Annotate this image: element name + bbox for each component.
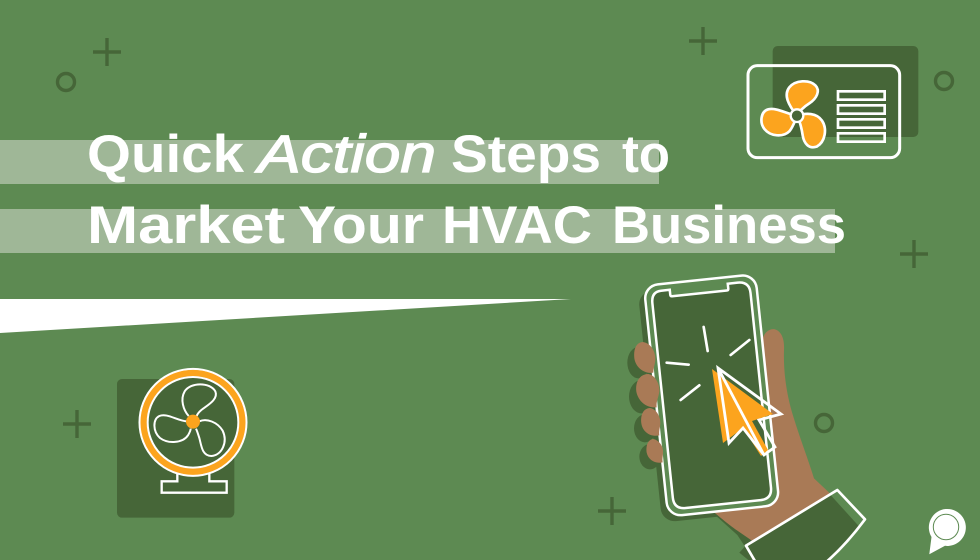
orange fan blades [761, 81, 825, 147]
title highlight bars [0, 140, 835, 253]
white wedge accent [0, 299, 571, 333]
unit backing panel [773, 46, 918, 137]
title: Business [612, 196, 846, 255]
click spark lines [667, 327, 749, 400]
phone body [644, 274, 779, 517]
title: Market [87, 196, 285, 255]
title: Action [254, 125, 436, 184]
icon: click cursor [712, 368, 781, 456]
hand and thumb [713, 329, 832, 542]
fan cage ring [140, 369, 246, 476]
icon: desk fan [117, 369, 246, 518]
fan hub [791, 109, 803, 122]
phone screen with notch [651, 281, 772, 509]
title: Quick [87, 125, 245, 184]
vent slats [838, 91, 885, 142]
finger shadows [627, 347, 661, 469]
cursor white outline [718, 368, 781, 455]
phone drop shadow [638, 280, 773, 523]
hand shadow [713, 493, 800, 552]
phone outer frame [644, 274, 779, 517]
unit outline [748, 66, 900, 158]
title: HVAC [442, 196, 592, 255]
illustration: hand holding phone [627, 274, 865, 560]
title [87, 125, 846, 255]
cuff shadow [739, 546, 760, 560]
logo: speech bubble [929, 509, 966, 554]
fan hub [186, 415, 200, 429]
icon: air conditioning unit [748, 46, 918, 158]
title: Steps [451, 125, 601, 184]
fan backing panel [117, 379, 234, 518]
cursor orange fill [712, 369, 773, 456]
fingers [634, 342, 663, 463]
title: to [622, 125, 670, 184]
fan blade outlines [154, 384, 225, 456]
fan base [162, 473, 227, 493]
title: Your [298, 196, 424, 255]
shirt cuff [746, 490, 865, 560]
